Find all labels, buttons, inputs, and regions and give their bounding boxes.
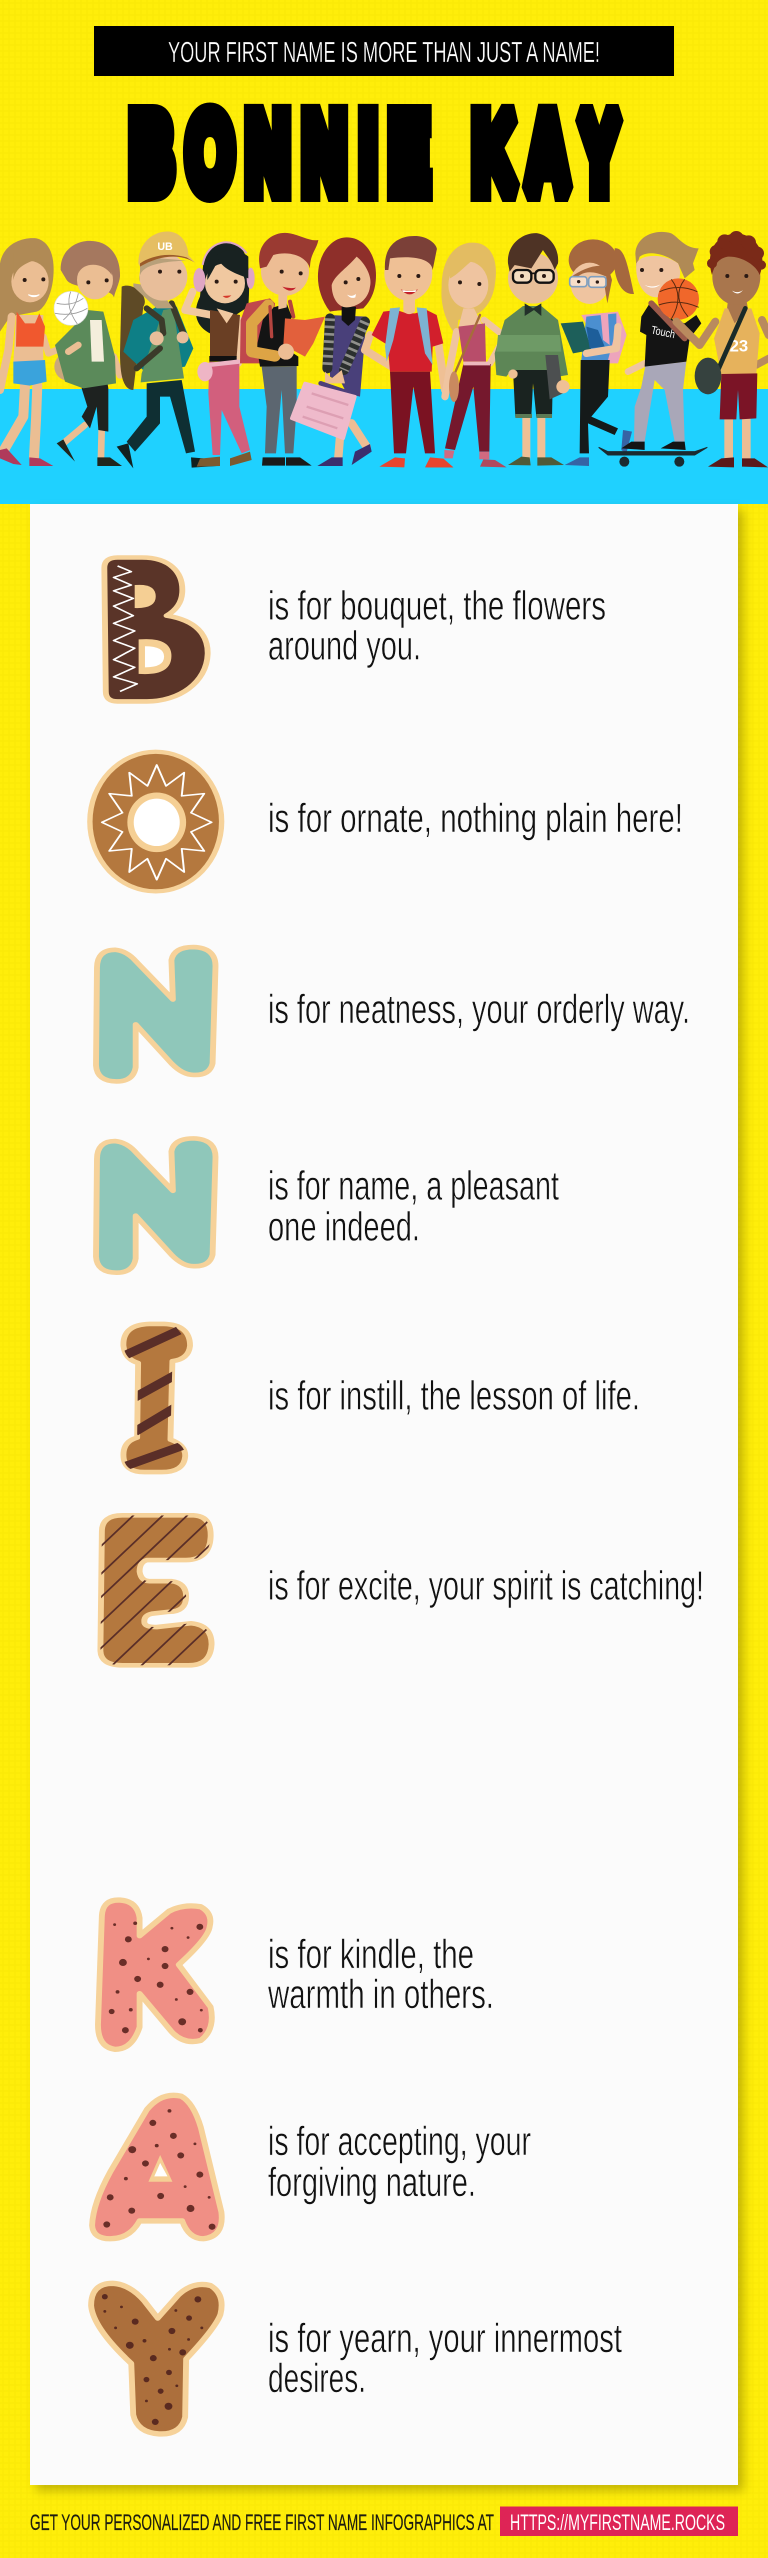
person 8: blonde girl (427, 243, 507, 467)
person 2: girl with volleyball (54, 241, 122, 466)
text: second N line: one indeed. (268, 1204, 420, 1250)
person 5: boy with book (240, 233, 325, 466)
cookie letter K (98, 1900, 212, 2049)
cookie letter E (98, 1513, 214, 1668)
people left group (0, 231, 255, 468)
text: B line: is for bouquet, the flowers (268, 582, 606, 628)
text: Y line: is for yearn, your innermost (268, 2315, 622, 2361)
text: K line (267, 1931, 494, 2017)
cookie letter I (123, 1324, 190, 1472)
cyan floor band (0, 389, 768, 504)
cookie letter B (104, 558, 208, 701)
shirt lettering: Touch (650, 325, 676, 341)
text: second N line: is for name, a pleasant (268, 1163, 559, 1209)
cap logo: UB (157, 241, 173, 253)
white content panel (30, 504, 744, 2491)
text: B line: around you. (268, 623, 421, 669)
text: Y line (268, 2315, 622, 2401)
person 12: curly-haired boy with bag (676, 231, 768, 467)
text: second N line (268, 1163, 559, 1250)
rows middle section (93, 1136, 218, 1668)
person 6: woman with pink bag (292, 237, 376, 466)
person 9: boy with glasses (495, 233, 570, 466)
people middle group (240, 233, 507, 467)
footer call to action: GET YOUR PERSONALIZED AND FREE FIRST NAME INFOGRAPHICS AT (30, 2510, 494, 2535)
rows bottom section (91, 1900, 222, 2434)
person 1: girl in orange top (0, 238, 78, 466)
illustration: group of students (0, 231, 768, 468)
cookie letter O (87, 750, 224, 894)
text: A line: forgiving nature. (268, 2159, 476, 2205)
person 10: girl with ponytail and tablet (561, 239, 634, 466)
person 7: boy in red t-shirt (365, 236, 453, 467)
header banner (94, 26, 674, 76)
text: Y line: desires. (268, 2355, 366, 2401)
title: BONNIE KAY: BONNIE KAY (130, 92, 620, 215)
cookie letter Y (91, 2283, 222, 2434)
rows top section (87, 558, 224, 1081)
text: K line: warmth in others. (267, 1971, 494, 2017)
person 11: skateboarder with basketball (599, 232, 707, 467)
cookie letter N second (96, 1138, 216, 1273)
cookie letter A (92, 2095, 222, 2239)
text: A line (268, 2118, 531, 2205)
person 4: girl with headphones (185, 242, 255, 467)
text: K line: is for kindle, the (268, 1931, 474, 1977)
person 3: hiker with cap and backpack (117, 231, 217, 468)
text: B line (268, 582, 606, 669)
cookie letter N (96, 947, 216, 1081)
jersey number: 23 (730, 337, 748, 356)
text: A line: is for accepting, your (268, 2118, 531, 2164)
people right group (495, 231, 768, 467)
